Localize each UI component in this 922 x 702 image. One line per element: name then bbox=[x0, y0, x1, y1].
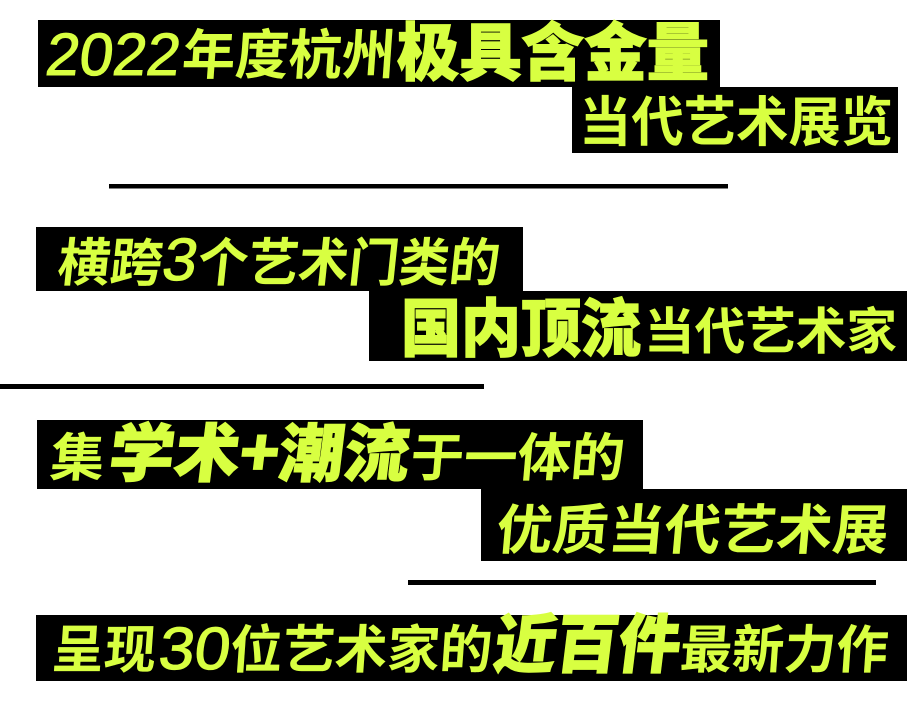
artists text: contemporary artists: 当代艺术家 bbox=[644, 292, 897, 364]
block: artists bbox=[36, 222, 907, 370]
title text: city: 年度杭州 bbox=[180, 11, 398, 90]
works text: newest works: 最新力作 bbox=[678, 608, 891, 683]
academic bar 1 background bbox=[37, 420, 643, 489]
academic text: lead character: 集 bbox=[48, 417, 108, 492]
works text: number thirty: 30 bbox=[155, 614, 235, 682]
academic text: second line: 优质当代艺术展 bbox=[494, 486, 893, 565]
works text: presenting: 呈现 bbox=[50, 608, 159, 683]
artists text: crossing: 横跨 bbox=[54, 222, 167, 297]
works text: artists: 位艺术家的 bbox=[228, 608, 495, 683]
academic text: tail of first line: 于一体的 bbox=[408, 417, 628, 492]
title text: year: 2022 bbox=[42, 20, 185, 88]
title text: second line: 当代艺术展览 bbox=[579, 78, 893, 157]
academic text: emphasised phrase: 学术+潮流 bbox=[105, 404, 416, 495]
title bar 1 background bbox=[38, 20, 720, 87]
title bar 2 background bbox=[572, 87, 898, 153]
artists bar 2 background bbox=[369, 291, 907, 361]
block: thirty artists bbox=[36, 592, 907, 686]
works text: emphasised phrase: 近百件 bbox=[490, 592, 687, 686]
artists text: emphasised phrase: 国内顶流 bbox=[401, 279, 641, 370]
block: academic and trendy bbox=[37, 404, 907, 565]
heading block: 2022 exhibition title bbox=[38, 3, 898, 157]
artists bar 1 background bbox=[36, 227, 523, 291]
artists text: number three: 3 bbox=[158, 225, 204, 293]
title text: emphasised phrase: 极具含金量 bbox=[397, 3, 709, 94]
academic bar 2 background bbox=[481, 489, 907, 561]
works bar background bbox=[36, 615, 907, 681]
artists text: disciplines: 个艺术门类的 bbox=[194, 222, 504, 297]
